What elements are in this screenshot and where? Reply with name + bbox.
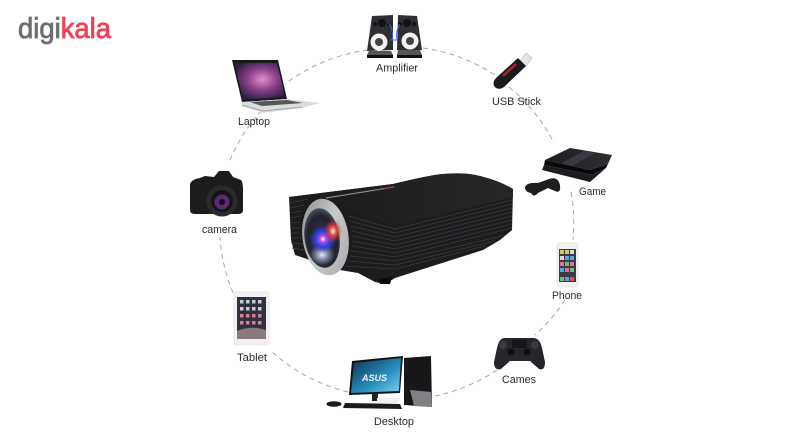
device: camera: [190, 171, 243, 236]
projector body: [289, 173, 513, 283]
label: Game: [579, 186, 606, 198]
device: desktop: [326, 356, 432, 428]
right speaker: [397, 15, 422, 50]
label: USB Stick: [492, 96, 541, 108]
tower: [404, 356, 432, 407]
label: Tablet: [237, 352, 267, 364]
label: Phone: [552, 290, 582, 302]
lens blue flare: [310, 226, 336, 252]
lens glass: [300, 206, 344, 270]
lens red flare: [324, 219, 342, 243]
blue light: [388, 22, 400, 40]
label: Laptop: [238, 116, 270, 128]
device: amplifier: [367, 15, 422, 74]
device: tablet: [234, 292, 269, 364]
device: laptop: [232, 60, 320, 128]
projector: [289, 173, 513, 284]
monitor: [349, 356, 403, 395]
controller: [525, 178, 560, 196]
keyboard: [343, 403, 402, 409]
left speaker: [367, 15, 393, 51]
device: desktop: ASUS: [361, 373, 387, 383]
label: Cames: [502, 374, 536, 386]
logo: digikala: digikala: [18, 13, 112, 45]
device: games controller: [494, 338, 545, 386]
lens ring: [297, 196, 354, 278]
device: USB stick: [492, 53, 541, 108]
projector foot: [378, 277, 392, 284]
label: Desktop: [374, 416, 414, 428]
lens lower reflection: [309, 244, 335, 266]
dashed connection ring: [220, 48, 574, 396]
label: camera: [202, 224, 238, 236]
projector status strip: [326, 187, 394, 198]
label: Amplifier: [376, 62, 418, 74]
device: game console: [525, 148, 612, 198]
projector top face: [289, 173, 513, 225]
device: phone: [552, 243, 582, 302]
projector vents: [290, 199, 512, 269]
mouse: [326, 401, 342, 407]
